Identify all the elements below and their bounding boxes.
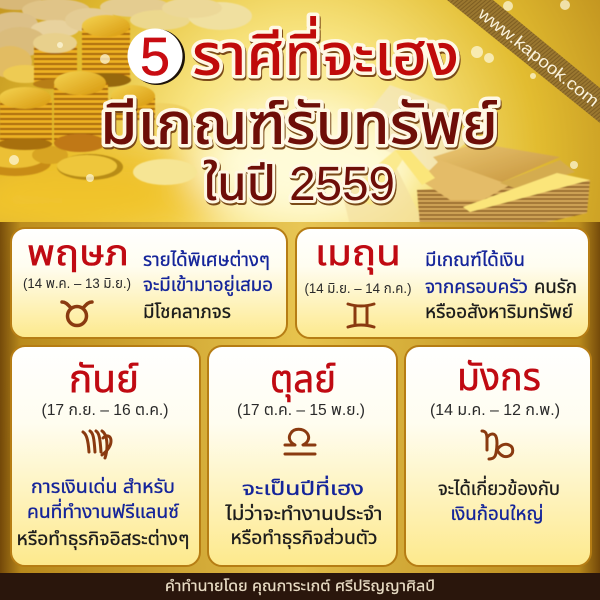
description: Capricorn (438, 475, 560, 525)
sign name: Virgo: กันย์ (69, 359, 139, 401)
icon: Virgo symbol (83, 431, 111, 458)
description: Capricorn: จะได้เกี่ยวข้องกับ (438, 475, 560, 500)
panel: Capricorn (405, 346, 591, 566)
lower background band (0, 222, 600, 574)
description: Taurus: จะมีเข้ามาอยู่เสมอ (143, 273, 273, 297)
coin stack back (33, 33, 77, 89)
coin stack left (0, 87, 52, 150)
title group (100, 16, 498, 211)
description: Gemini: มีเกณฑ์ได้เงิน (425, 248, 525, 271)
badge: number 5: 5 (140, 27, 170, 87)
footer bar (0, 573, 600, 600)
title line 1: ราศีที่จะเฮง (192, 16, 459, 88)
sign name: Libra: ตุลย์ (270, 359, 336, 402)
sign name: Capricorn: มังกร (457, 357, 541, 399)
description: Virgo: การเงินเด่น สำหรับ (31, 475, 175, 498)
sign name: Taurus: พฤษภ (27, 232, 129, 273)
panel: Virgo (11, 346, 200, 566)
description: Virgo: คนที่ทำงานฟรีแลนซ์ (27, 498, 179, 523)
description: Virgo: หรือทำธุรกิจอิสระต่างๆ (16, 527, 190, 550)
description: Libra (224, 475, 382, 549)
icon: Capricorn symbol (482, 431, 513, 459)
title line 3: ในปี 2559 (203, 158, 395, 211)
panel: Taurus (11, 228, 287, 338)
description: Libra: ไม่ว่าจะทำงานประจำ (224, 502, 382, 525)
icon: Gemini symbol (348, 304, 374, 327)
ribbon: www.kapook.com: www.kapook.com (474, 4, 600, 111)
coin stack front (54, 71, 108, 152)
description: Libra: หรือทำธุรกิจส่วนตัว (230, 526, 378, 549)
coin stack right (111, 85, 155, 120)
sign name: Gemini: เมถุน (315, 232, 401, 274)
date: Capricorn: (14 ม.ค. – 12 ก.พ.) (430, 402, 560, 419)
badge: number 5 (128, 27, 185, 87)
description: Gemini: คนรัก (534, 277, 577, 298)
description: Capricorn: เงินก้อนใหญ่ (450, 502, 544, 525)
panel: Libra (208, 346, 397, 566)
footer credit: คำทำนายโดย คุณการะเกต์ ศรีปริญญาศิลป์ (165, 578, 435, 595)
icon: Taurus symbol (62, 302, 92, 326)
icon: Libra symbol (285, 429, 315, 454)
description: Gemini: หรืออสังหาริมทรัพย์ (425, 302, 573, 323)
date: Libra: (17 ต.ค. – 15 พ.ย.) (237, 402, 365, 419)
description: Taurus: รายได้พิเศษต่างๆ (143, 248, 270, 271)
background: soft light across the lower header (0, 115, 420, 240)
date: Taurus: (14 พ.ค. – 13 มิ.ย.) (23, 275, 131, 291)
sparkles (9, 0, 578, 182)
panel: Gemini (296, 228, 589, 338)
description: Virgo (16, 475, 190, 550)
description: Taurus: มีโชคลาภจร (143, 302, 231, 323)
description: Taurus (143, 248, 273, 323)
coin stack tall back (81, 15, 131, 87)
background coins: scattered flat coins (0, 0, 252, 185)
description: Gemini: จากครอบครัว (425, 277, 528, 298)
banknote bundle (340, 85, 590, 227)
description: Gemini (425, 248, 577, 323)
title line 2: มีเกณฑ์รับทรัพย์ (100, 92, 498, 157)
ribbon: www.kapook.com (447, 0, 600, 123)
date: Virgo: (17 ก.ย. – 16 ต.ค.) (42, 402, 168, 419)
description: Libra: จะเป็นปีที่เฮง (242, 475, 364, 500)
date: Gemini: (14 มิ.ย. – 14 ก.ค.) (304, 280, 412, 296)
